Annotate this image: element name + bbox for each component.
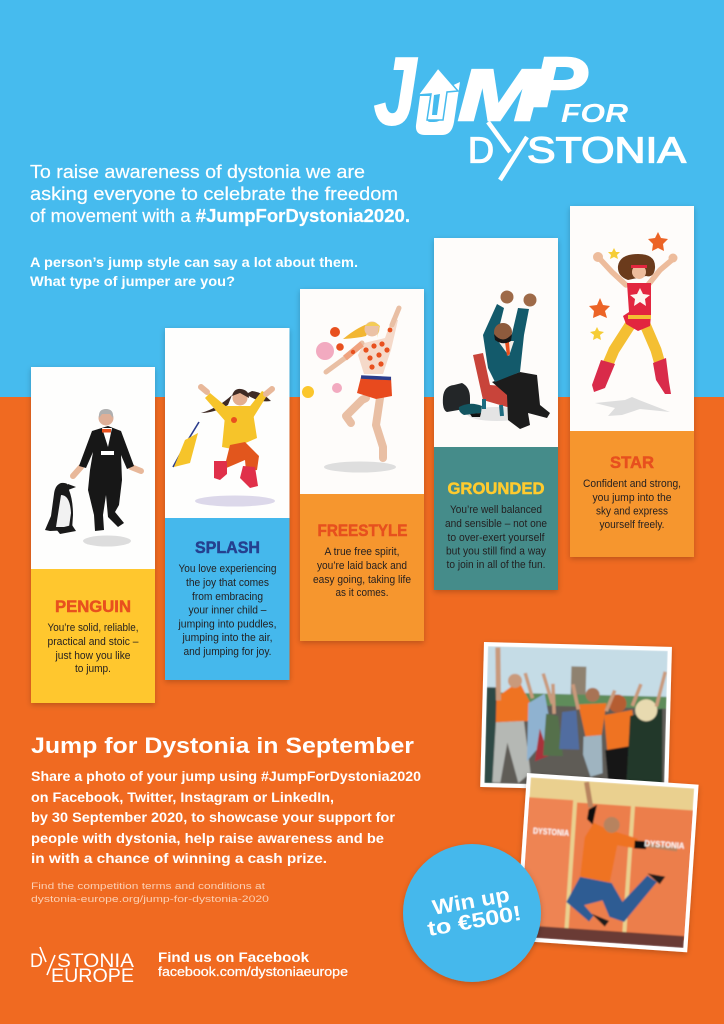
background: orange bottom xyxy=(0,397,724,1024)
description xyxy=(313,546,411,599)
facebook details: Find us on Facebook xyxy=(158,949,309,965)
question text: A person’s jump style can say a lot about them. xyxy=(30,255,358,270)
logo: dystonia europe: EUROPE xyxy=(51,966,134,987)
photo: man jumping in orange t-shirt: DYSTONIA xyxy=(644,839,685,851)
description: You’re well balanced xyxy=(450,504,542,516)
description: A true free spirit, xyxy=(324,546,400,558)
text block: terms and conditions: dystonia-europe.org/jump-for-dystonia-2020 xyxy=(31,894,269,905)
illustration: man in tuxedo with penguin xyxy=(45,409,141,546)
description xyxy=(445,504,547,571)
description xyxy=(583,478,681,531)
photo: man jumping in orange t-shirt: DYSTONIA xyxy=(533,827,569,838)
facebook details: facebook.com/dystoniaeurope xyxy=(158,965,348,979)
panel: grounded xyxy=(434,238,558,590)
badge: win up to 500: to €500! xyxy=(426,902,523,941)
question text: What type of jumper are you? xyxy=(30,274,235,289)
logo: Jump for Dystonia: STONIA xyxy=(527,130,686,170)
illustration: girl in yellow raincoat xyxy=(173,387,275,506)
description: from embracing xyxy=(192,591,263,603)
description: to jump. xyxy=(75,663,111,675)
intro paragraph: To raise awareness of dystonia we are xyxy=(30,161,365,182)
text block: terms and conditions: Find the competition terms and conditions at xyxy=(31,881,265,892)
description: to over-exert yourself xyxy=(448,532,545,544)
title: GROUNDED xyxy=(448,479,544,498)
logo: dystonia europe: STONIA xyxy=(57,950,134,972)
illustration: man seated in armchair xyxy=(443,290,550,429)
text block: terms and conditions xyxy=(31,881,269,905)
description: yourself freely. xyxy=(600,519,664,531)
intro paragraph xyxy=(30,161,410,226)
description: and sensible – not one xyxy=(445,518,547,530)
badge: win up to 500: Win up xyxy=(431,884,511,920)
description: sky and express xyxy=(596,506,668,518)
badge: win up to 500 xyxy=(403,844,541,982)
heading: jump for dystonia in september: Jump for Dystonia in September xyxy=(31,733,414,758)
text block: how to take part: people with dystonia, help raise awareness and be xyxy=(31,831,385,846)
description: jumping into the air, xyxy=(182,632,272,644)
description: you’re laid back and xyxy=(317,560,407,572)
text block: how to take part: Share a photo of your jump using #JumpForDystonia2020 xyxy=(31,769,421,784)
description: jumping into puddles, xyxy=(178,618,276,630)
description xyxy=(48,622,139,675)
description: Confident and strong, xyxy=(583,478,681,490)
description: but you still find a way xyxy=(446,546,547,558)
text block: how to take part: on Facebook, Twitter, Instagram or LinkedIn, xyxy=(31,790,334,805)
title: STAR xyxy=(610,453,654,472)
intro paragraph: asking everyone to celebrate the freedom xyxy=(30,183,398,204)
photo: man jumping in orange t-shirt xyxy=(516,773,699,952)
title: PENGUIN xyxy=(55,597,131,616)
facebook details xyxy=(158,949,348,979)
description: easy going, taking life xyxy=(313,574,411,586)
illustration: woman in superhero costume with stars xyxy=(589,232,678,416)
logo: dystonia europe: D xyxy=(30,950,43,972)
intro paragraph: of movement with a #JumpForDystonia2020. xyxy=(30,205,410,226)
description: You love experiencing xyxy=(178,563,277,575)
panel: freestyle xyxy=(300,289,424,641)
background: blue top xyxy=(0,0,724,397)
description: the joy that comes xyxy=(186,577,269,589)
title: FREESTYLE xyxy=(318,521,408,540)
description: You’re solid, reliable, xyxy=(48,622,138,634)
title: SPLASH xyxy=(195,538,260,557)
logo: Jump for Dystonia: J xyxy=(374,38,418,145)
description: and jumping for joy. xyxy=(184,646,272,658)
text block: how to take part: in with a chance of winning a cash prize. xyxy=(31,851,327,866)
logo: Jump for Dystonia: FOR xyxy=(561,98,628,128)
text block: how to take part: by 30 September 2020, to showcase your support for xyxy=(31,810,396,825)
panel: star xyxy=(570,206,694,557)
logo: dystonia europe xyxy=(30,947,134,987)
logo: Jump for Dystonia: P xyxy=(533,43,587,121)
description: your inner child – xyxy=(188,604,267,616)
photo: group jumping xyxy=(480,642,672,792)
description: practical and stoic – xyxy=(48,636,139,648)
logo: Jump for Dystonia: M xyxy=(458,56,543,136)
text block: how to take part xyxy=(31,769,421,866)
logo: Jump for Dystonia xyxy=(374,38,686,180)
logo: Jump for Dystonia: D xyxy=(468,130,494,170)
illustration: woman in floral top xyxy=(302,308,399,472)
description: just how you like xyxy=(55,650,131,662)
panel: penguin xyxy=(31,367,155,703)
question text xyxy=(30,255,358,289)
description: to join in all of the fun. xyxy=(446,559,546,571)
description xyxy=(178,563,277,658)
panel: splash xyxy=(165,328,290,680)
description: you jump into the xyxy=(592,492,672,504)
description: as it comes. xyxy=(336,587,388,599)
